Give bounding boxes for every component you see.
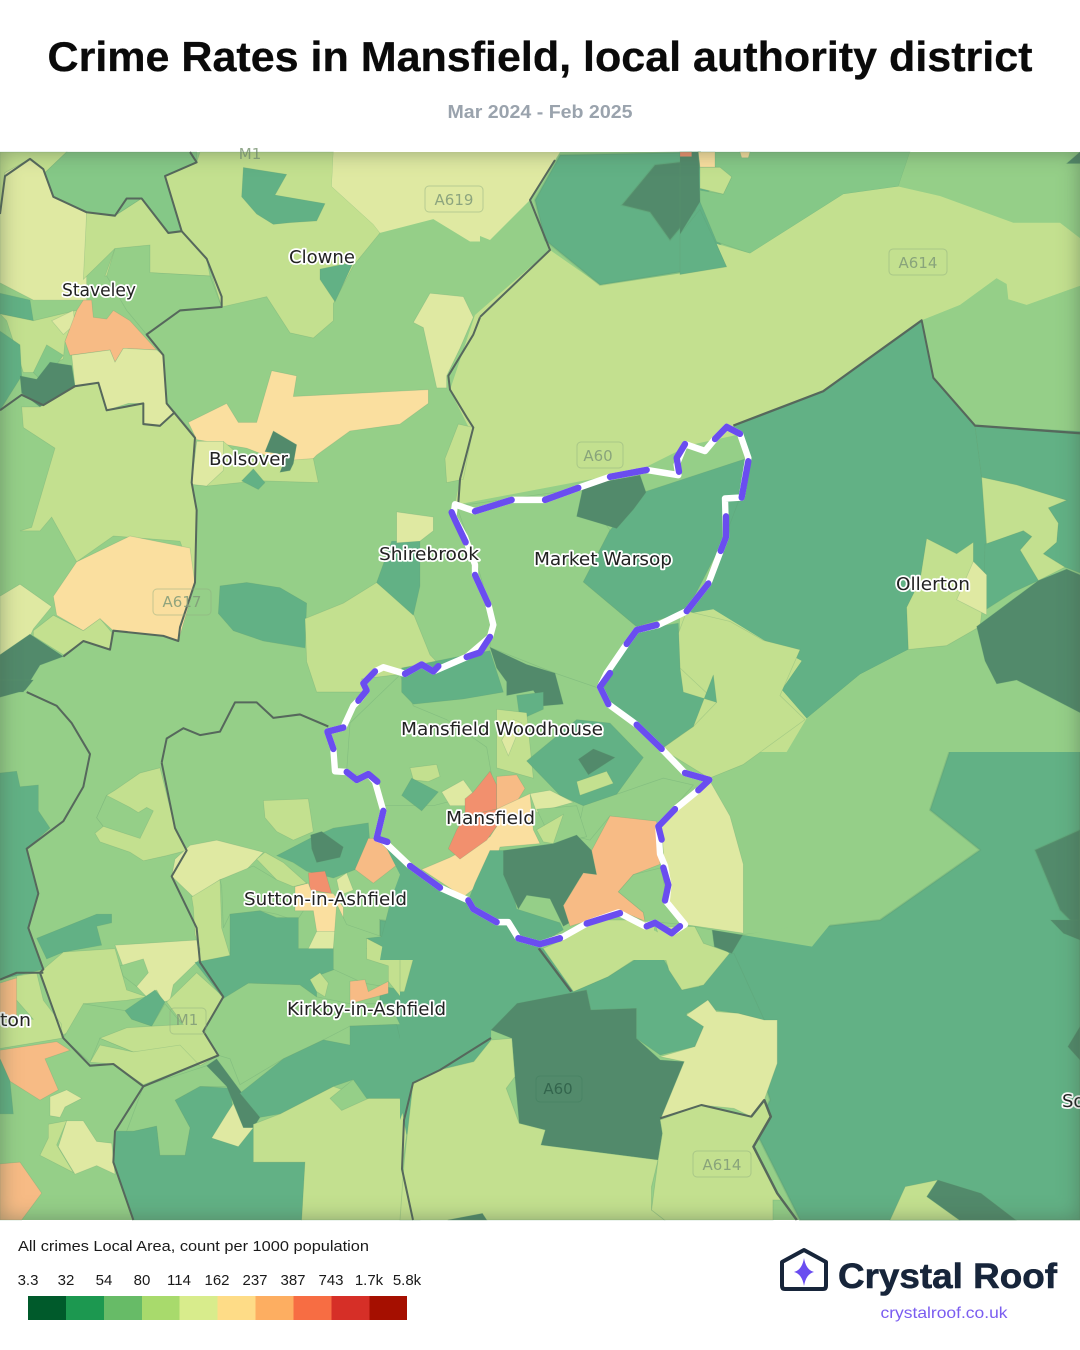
icon: Crystal Roof house logo [782,1250,826,1289]
district boundary lines [0,152,1080,1220]
regions: south-east [400,920,1080,1220]
road labels: A614 [703,1156,741,1174]
road labels [153,145,947,1177]
legend: colour scale: 114 [167,1272,191,1289]
legend: colour scale: 237 [242,1272,268,1289]
place labels: Ollerton [896,574,970,595]
legend: colour scale: 387 [280,1272,306,1289]
legend: colour scale: 743 [318,1272,344,1289]
legend: colour scale: 80 [134,1272,150,1289]
place labels: Clowne [289,247,355,268]
regions: north-west [0,152,480,692]
road labels: A614 [899,254,937,272]
subtitle: date range: Mar 2024 - Feb 2025 [448,102,632,122]
regions: south-west [0,680,420,1220]
legend: colour scale: 1.7k [355,1272,384,1289]
place labels: Kirkby-in-Ashfield [287,999,446,1020]
legend: colour scale [18,1272,422,1320]
map edge vignette [0,152,1080,1220]
place labels: Mansfield Woodhouse [401,719,603,740]
legend: colour scale: 32 [58,1272,74,1289]
regions: Mansfield district [347,458,805,960]
place labels: Staveley [62,280,136,301]
brand name: Crystal Roof [838,1257,1057,1296]
place labels: Mansfield [446,808,535,829]
place labels: Sutton-in-Ashfield [244,889,407,910]
road labels: A60 [583,447,613,465]
road labels: M1 [239,145,261,163]
title: Crime Rates in Mansfield, local authority district [48,33,1033,80]
place labels [0,247,1080,1112]
place labels: Market Warsop [534,549,672,570]
legend: colour scale: 5.8k [393,1272,422,1289]
boundary: Mansfield local authority district [327,427,748,944]
brand URL: crystalroof.co.uk [880,1305,1009,1322]
legend: colour scale: 162 [204,1272,230,1289]
regions: north-east [680,152,1080,752]
legend title: All crimes Local Area, count per 1000 population [18,1238,369,1255]
legend: colour scale: 3.3 [18,1272,38,1289]
road labels: A60 [543,1080,573,1098]
place labels: Shirebrook [379,544,480,565]
place labels: ton [0,1010,31,1031]
road labels: M1 [176,1011,198,1029]
legend: colour scale: 54 [96,1272,112,1289]
road labels: A617 [163,593,201,611]
road labels: A619 [435,191,473,209]
place labels: Bolsover [209,449,289,470]
panel: choropleth map [0,152,1080,1220]
